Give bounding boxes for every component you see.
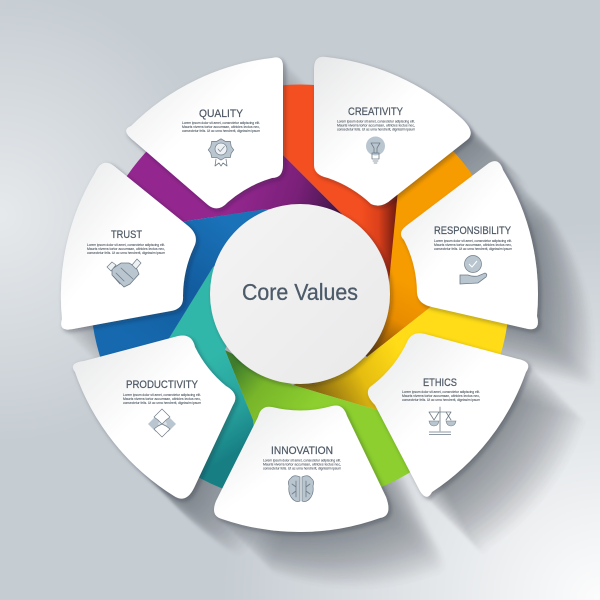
body text: Lorem ipsum dolor sit amet, consectetur adipiscing elit. (434, 238, 512, 243)
heading: RESPONSIBILITY (434, 225, 512, 237)
long shadows behind the cards (65, 61, 594, 588)
body text: consectetur felis. Ut ac urna hendrerit, dignissim ipsum (123, 400, 202, 405)
heading: CREATIVITY (348, 106, 404, 118)
centre circle (210, 204, 390, 384)
card shape (214, 405, 388, 532)
body text: Lorem ipsum dolor sit amet, consectetur adipiscing elit. (402, 389, 480, 394)
panel: ethics (368, 333, 528, 497)
panel: creativity (314, 57, 471, 206)
icon: badge (208, 139, 234, 166)
card shape (73, 335, 235, 499)
body text: Mauris viverra tortor accumsan, ultricies lectus nec, (337, 122, 415, 128)
body text: consectetur felis. Ut ac urna hendrerit, dignissim ipsum (337, 126, 416, 132)
circle (210, 204, 390, 384)
segment: red (283, 84, 398, 282)
body text: Lorem ipsum dolor sit amet, consectetur adipiscing elit. (263, 458, 341, 462)
body text: Mauris viverra tortor accumsan, ultricies lectus nec, (402, 393, 480, 398)
segment: orange (366, 151, 473, 357)
body text: Lorem ipsum dolor sit amet, consectetur adipiscing elit. (87, 242, 165, 247)
body text: Mauris viverra tortor accumsan, ultricies lectus nec, (263, 462, 341, 466)
heading: QUALITY (199, 108, 244, 120)
body text: consectetur felis. Ut ac urna hendrerit, dignissim ipsum (434, 246, 513, 251)
icon: scales (429, 407, 456, 434)
card shape (61, 163, 196, 330)
card shape (314, 57, 471, 206)
panel: productivity (73, 335, 235, 499)
body text: consectetur felis. Ut ac urna hendrerit, dignissim ipsum (263, 466, 342, 470)
segment: teal (169, 267, 254, 488)
heading: ETHICS (423, 377, 457, 389)
segment: green (225, 350, 410, 487)
body text: Mauris viverra tortor accumsan, ultricies lectus nec, (123, 396, 201, 401)
body text: Mauris viverra tortor accumsan, ultricies lectus nec, (434, 242, 512, 247)
body text: consectetur felis. Ut ac urna hendrerit, dignissim ipsum (402, 397, 481, 402)
card shape (126, 57, 283, 208)
centre title: Core Values (242, 279, 358, 305)
body text: Lorem ipsum dolor sit amet, consectetur adipiscing elit. (182, 120, 260, 125)
panel: trust (61, 163, 196, 330)
body text: consectetur felis. Ut ac urna hendrerit, dignissim ipsum (87, 250, 166, 255)
heading: TRUST (111, 229, 142, 241)
segment: yellow (293, 306, 508, 410)
body text: Lorem ipsum dolor sit amet, consectetur adipiscing elit. (337, 118, 415, 124)
panel: responsibility (401, 161, 538, 329)
icon: light bulb (366, 136, 385, 163)
body text: Mauris viverra tortor accumsan, ultricies lectus nec, (182, 124, 260, 129)
heading: INNOVATION (271, 445, 333, 457)
icon: handshake (107, 259, 141, 287)
icon: hand with check (460, 256, 487, 284)
icon: brain (288, 476, 314, 502)
heading: PRODUCTIVITY (126, 379, 199, 391)
panel: innovation (214, 405, 388, 532)
card shape (401, 161, 538, 329)
body text: Mauris viverra tortor accumsan, ultricies lectus nec, (87, 246, 165, 251)
coloured ring (92, 84, 508, 488)
segment: blue (92, 209, 268, 357)
body text: Lorem ipsum dolor sit amet, consectetur adipiscing elit. (123, 392, 201, 397)
segment: purple (126, 152, 344, 222)
icon: puzzle (148, 409, 176, 437)
body text: consectetur felis. Ut ac urna hendrerit, dignissim ipsum (182, 128, 261, 133)
panel: quality (126, 57, 283, 208)
card shape (368, 333, 528, 497)
